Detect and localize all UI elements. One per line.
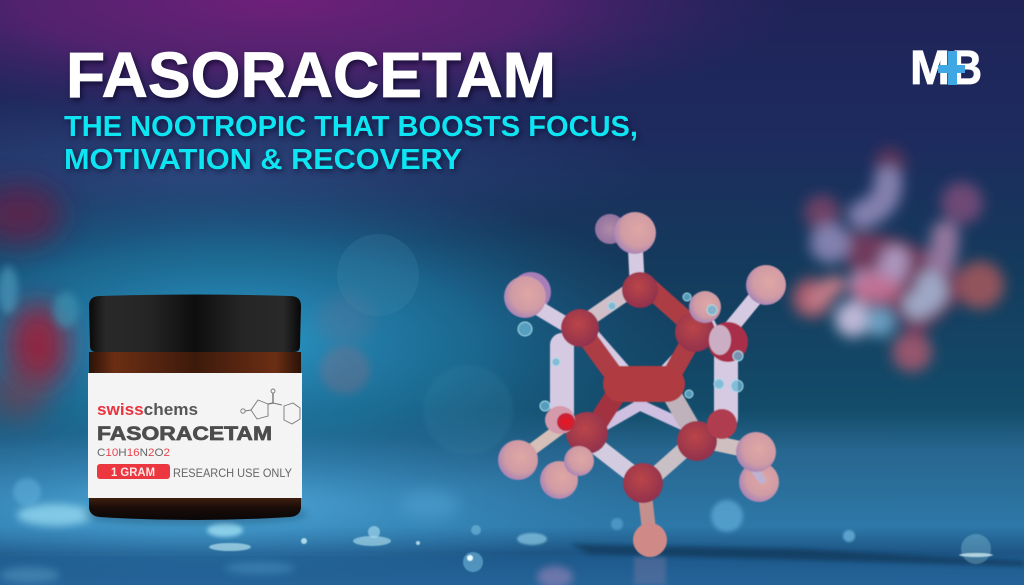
bokeh lights xyxy=(0,234,855,583)
research use note: RESEARCH USE ONLY xyxy=(173,466,292,480)
front atoms xyxy=(498,212,786,557)
M+B logo xyxy=(910,42,982,95)
water droplets xyxy=(209,525,993,572)
amber glass base xyxy=(89,495,301,520)
back atoms xyxy=(511,214,779,502)
molecule model xyxy=(498,212,786,557)
product jar xyxy=(83,294,307,524)
1 gram badge xyxy=(97,464,170,479)
subtitle xyxy=(64,111,638,176)
white-lilac bonds xyxy=(515,240,766,530)
blurred red molecule at left edge xyxy=(0,185,79,420)
blurred background molecule xyxy=(792,147,1004,372)
subtitle: THE NOOTROPIC THAT BOOSTS FOCUS, xyxy=(64,111,638,143)
red joints and struts xyxy=(545,272,748,503)
chemical formula: C10H16N2O2 xyxy=(97,447,170,459)
small water beads xyxy=(518,293,743,411)
label brand: swisschems xyxy=(97,401,198,419)
1 gram badge: 1 GRAM xyxy=(111,467,155,479)
M+B logo: M xyxy=(910,42,950,95)
white label xyxy=(88,373,302,498)
jar lid xyxy=(89,294,301,352)
subtitle: MOTIVATION & RECOVERY xyxy=(64,144,462,176)
floor surface with contact shadow xyxy=(0,544,1024,585)
structural formula drawing xyxy=(241,389,300,424)
label name: FASORACETAM xyxy=(97,424,272,445)
main title: FASORACETAM xyxy=(66,39,556,111)
amber glass band xyxy=(89,352,301,374)
M+B logo: B xyxy=(952,42,982,95)
